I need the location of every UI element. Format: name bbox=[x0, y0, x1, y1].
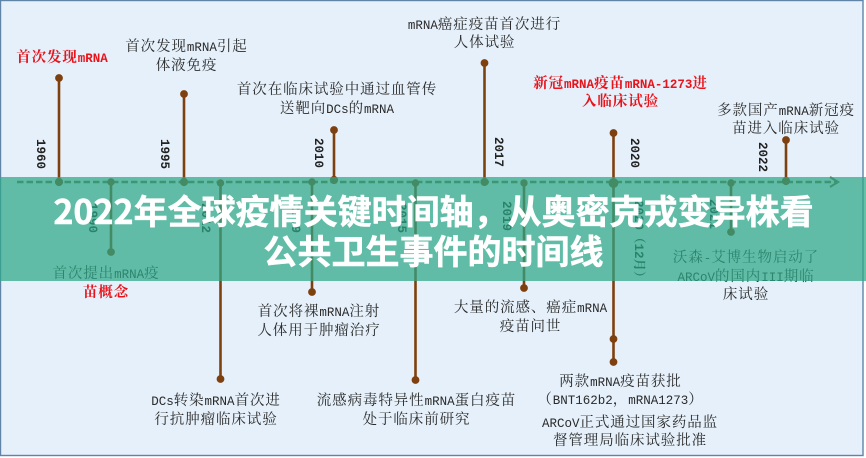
milestone: 2021 ARCoV phase III: 沃森-艾博生物启动了 bbox=[673, 248, 819, 266]
title: 2022年全球疫情关键时间轴，从奥密克戎变异株看 bbox=[53, 185, 814, 234]
milestone: 2017: mRNA癌症疫苗首次进行 bbox=[408, 16, 561, 33]
year labels: 2020 bbox=[631, 200, 645, 230]
milestone: DCs transfection: DCs转染mRNA首次进 bbox=[151, 391, 281, 409]
milestone: 2010: 首次在临床试验中通过血管传 bbox=[237, 81, 437, 98]
milestone: 2021 ARCoV phase III bbox=[673, 248, 819, 303]
milestone: 2022: 多款国产mRNA新冠疫 bbox=[717, 102, 855, 119]
milestone: 2021 ARCoV phase III: 床试验 bbox=[723, 286, 769, 303]
year labels: 1990 bbox=[85, 203, 99, 233]
milestone: 2020 mRNA-1273: 入临床试验 bbox=[582, 92, 659, 110]
milestone: 2022: 苗进入临床试验 bbox=[732, 120, 840, 137]
milestone: two vaccines approved: （BNT162b2，mRNA1273） bbox=[537, 391, 704, 408]
milestone: influenza vaccine: 处于临床前研究 bbox=[363, 411, 470, 428]
milestone: 1990: 苗概念 bbox=[83, 283, 130, 301]
milestone: 2010: 送靶向DCs的mRNA bbox=[280, 99, 395, 117]
milestone: 2021 ARCoV phase III: ARCoV的国内III期临 bbox=[677, 268, 815, 285]
milestone: 2022 bbox=[717, 102, 855, 137]
timeline axis with arrow bbox=[17, 177, 838, 187]
milestone: naked mRNA injection: 首次将裸mRNA注射 bbox=[258, 303, 380, 320]
upper milestone stems and dots bbox=[55, 60, 790, 186]
milestone: ARCoV approval: 督管理局临床试验批准 bbox=[553, 432, 707, 449]
milestone: naked mRNA injection bbox=[257, 303, 381, 339]
milestone: 2017: 人体试验 bbox=[454, 34, 515, 51]
year labels: 2021 bbox=[706, 199, 720, 229]
title bbox=[53, 185, 814, 274]
year labels bbox=[33, 137, 769, 284]
milestone: two vaccines approved: 两款mRNA疫苗获批 bbox=[559, 372, 682, 390]
milestone: DCs transfection bbox=[151, 391, 281, 428]
year labels: 2020 bbox=[627, 138, 641, 168]
milestone: 1995: 首次发现mRNA引起 bbox=[125, 37, 248, 55]
year labels: 2012 bbox=[198, 203, 212, 233]
milestone: ARCoV approval bbox=[542, 413, 718, 449]
milestone: 1990: 首次提出mRNA疫 bbox=[52, 264, 160, 282]
milestone: 2019: 大量的流感、癌症mRNA bbox=[454, 298, 608, 316]
lower milestone stems and dots bbox=[108, 179, 734, 383]
year labels: （12月） bbox=[631, 231, 646, 284]
year labels: 1960 bbox=[33, 139, 47, 169]
milestone: two vaccines approved bbox=[537, 372, 704, 408]
milestone: naked mRNA injection: 人体用于肿瘤治疗 bbox=[257, 322, 381, 339]
milestone: 2010 bbox=[237, 81, 437, 117]
milestone: 1990 bbox=[52, 264, 160, 301]
milestone: 2020 mRNA-1273: 新冠mRNA疫苗mRNA-1273进 bbox=[533, 74, 708, 92]
year labels: 2010 bbox=[311, 138, 325, 168]
milestone: 1960 first discovery of mRNA: 首次发现mRNA bbox=[16, 48, 108, 66]
milestone: 2019 bbox=[454, 298, 608, 335]
milestone: 1995: 体液免疫 bbox=[156, 56, 217, 74]
year labels: 2009 bbox=[288, 203, 302, 233]
milestone: 1995 bbox=[125, 37, 248, 74]
title: 公共卫生事件的时间线 bbox=[264, 225, 604, 274]
milestone: 2017 bbox=[408, 16, 561, 51]
milestone: influenza vaccine: 流感病毒特异性mRNA蛋白疫苗 bbox=[317, 391, 516, 409]
milestone: influenza vaccine bbox=[317, 391, 516, 428]
year labels: 2017 bbox=[491, 137, 505, 167]
year labels: 2022 bbox=[755, 142, 769, 172]
year labels: 2019 bbox=[499, 201, 513, 231]
milestone: DCs transfection: 行抗肿瘤临床试验 bbox=[154, 411, 278, 428]
2020 milestone stem with multiple dots bbox=[609, 130, 618, 365]
milestone: 2019: 疫苗问世 bbox=[500, 318, 561, 335]
year labels: 1995 bbox=[157, 139, 171, 169]
milestone: ARCoV approval: ARCoV正式通过国家药品监 bbox=[542, 413, 718, 431]
translucent title band bbox=[0, 177, 866, 281]
year labels: 2015 bbox=[394, 203, 408, 233]
milestone: 2020 mRNA-1273 bbox=[533, 74, 708, 110]
